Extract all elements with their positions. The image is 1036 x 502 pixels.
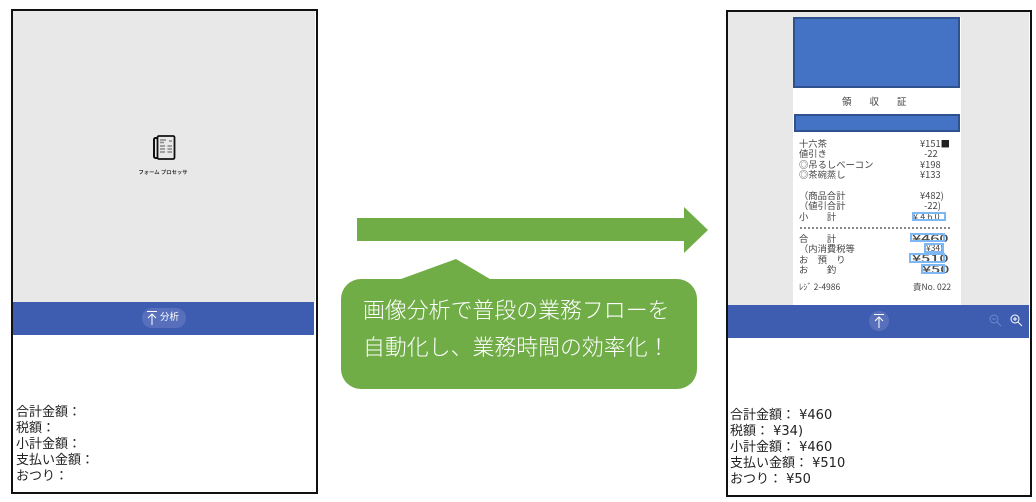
detected change: ¥50 xyxy=(922,261,949,276)
line items: 値引き xyxy=(799,146,827,160)
extracted fields: empty: 小計金額： xyxy=(16,437,81,452)
subtotal labels: （値引合計 xyxy=(799,198,846,212)
total labels: お 預 り xyxy=(799,252,846,266)
total labels: お 釣 xyxy=(799,262,836,276)
extracted fields: results: 税額： ¥34) xyxy=(730,424,803,439)
subtotal labels xyxy=(799,188,846,223)
extracted fields: empty: 税額： xyxy=(16,421,55,436)
register number: ﾚｼﾞ 2-4986 xyxy=(799,281,840,293)
icon: upload arrow xyxy=(147,311,157,325)
extracted fields: results: 小計金額： ¥460 xyxy=(730,440,832,455)
icon: zoom out xyxy=(990,314,1002,326)
detected total: ¥460 xyxy=(912,230,948,245)
label: form processor: フォーム プロセッサ xyxy=(138,170,188,176)
icon: form processor xyxy=(153,135,176,160)
extracted fields: empty: 支払い金額： xyxy=(16,453,94,468)
staff number: 責No. 022 xyxy=(913,281,951,293)
callout shape xyxy=(341,259,697,389)
callout text: 自動化し、業務時間の効率化！ xyxy=(363,335,669,360)
total labels: （内消費税等 xyxy=(799,241,855,255)
detected tax: ¥34) xyxy=(926,242,943,254)
button: upload xyxy=(869,311,889,331)
subtotal values xyxy=(920,188,944,212)
result toolbar xyxy=(728,305,1029,338)
line prices: ¥133 xyxy=(920,167,941,181)
total labels: 合 計 xyxy=(799,231,836,245)
icon: upload arrow xyxy=(874,314,884,328)
receipt xyxy=(793,17,961,305)
subtotal values: -22) xyxy=(924,198,941,212)
redacted header xyxy=(793,17,960,88)
line items: 十六茶 xyxy=(799,136,827,150)
panel: before analysis app screen xyxy=(11,9,318,494)
detection box: tax xyxy=(924,243,944,253)
detection box: tendered xyxy=(909,253,945,263)
dotted divider xyxy=(800,227,950,229)
line prices: -22 xyxy=(924,146,938,160)
icon: zoom in xyxy=(1010,314,1022,326)
callout xyxy=(341,259,697,389)
line prices: ¥151■ xyxy=(920,136,950,150)
extracted fields: results: おつり： ¥50 xyxy=(730,472,811,487)
extracted fields: results xyxy=(730,408,845,487)
extracted fields: results: 支払い金額： ¥510 xyxy=(730,456,845,471)
line items xyxy=(799,136,873,181)
button label: 分析 xyxy=(160,312,179,323)
button: analyze xyxy=(142,308,186,328)
line items: ◎茶碗蒸し xyxy=(799,167,846,181)
callout text xyxy=(363,298,669,360)
extracted fields: empty xyxy=(16,404,94,484)
subtotal labels: （商品合計 xyxy=(799,188,846,202)
line prices: ¥198 xyxy=(920,157,941,171)
analyze toolbar xyxy=(13,302,314,335)
receipt title: 領収証 xyxy=(842,94,925,108)
line items: ◎吊るしベーコン xyxy=(799,157,873,171)
line prices xyxy=(920,136,950,181)
subtotal values: ¥482) xyxy=(920,188,944,202)
redacted bar xyxy=(794,114,960,132)
detected subtotal: ¥460 xyxy=(913,210,942,223)
extracted fields: empty: おつり： xyxy=(16,469,68,484)
subtotal labels: 小 計 xyxy=(799,209,836,223)
panel: after analysis app screen xyxy=(726,10,1032,497)
image placeholder area xyxy=(13,11,315,302)
extracted fields: empty: 合計金額： xyxy=(16,405,81,420)
detection box: total xyxy=(910,233,945,242)
callout text: 画像分析で普段の業務フローを xyxy=(363,298,669,323)
total labels xyxy=(799,231,855,276)
detection box: change xyxy=(921,264,945,274)
detected tendered: ¥510 xyxy=(912,250,948,265)
arrow: before to after xyxy=(357,207,708,253)
extracted fields: results: 合計金額： ¥460 xyxy=(730,408,832,423)
image background xyxy=(728,12,1029,305)
detection box: subtotal xyxy=(912,212,946,221)
